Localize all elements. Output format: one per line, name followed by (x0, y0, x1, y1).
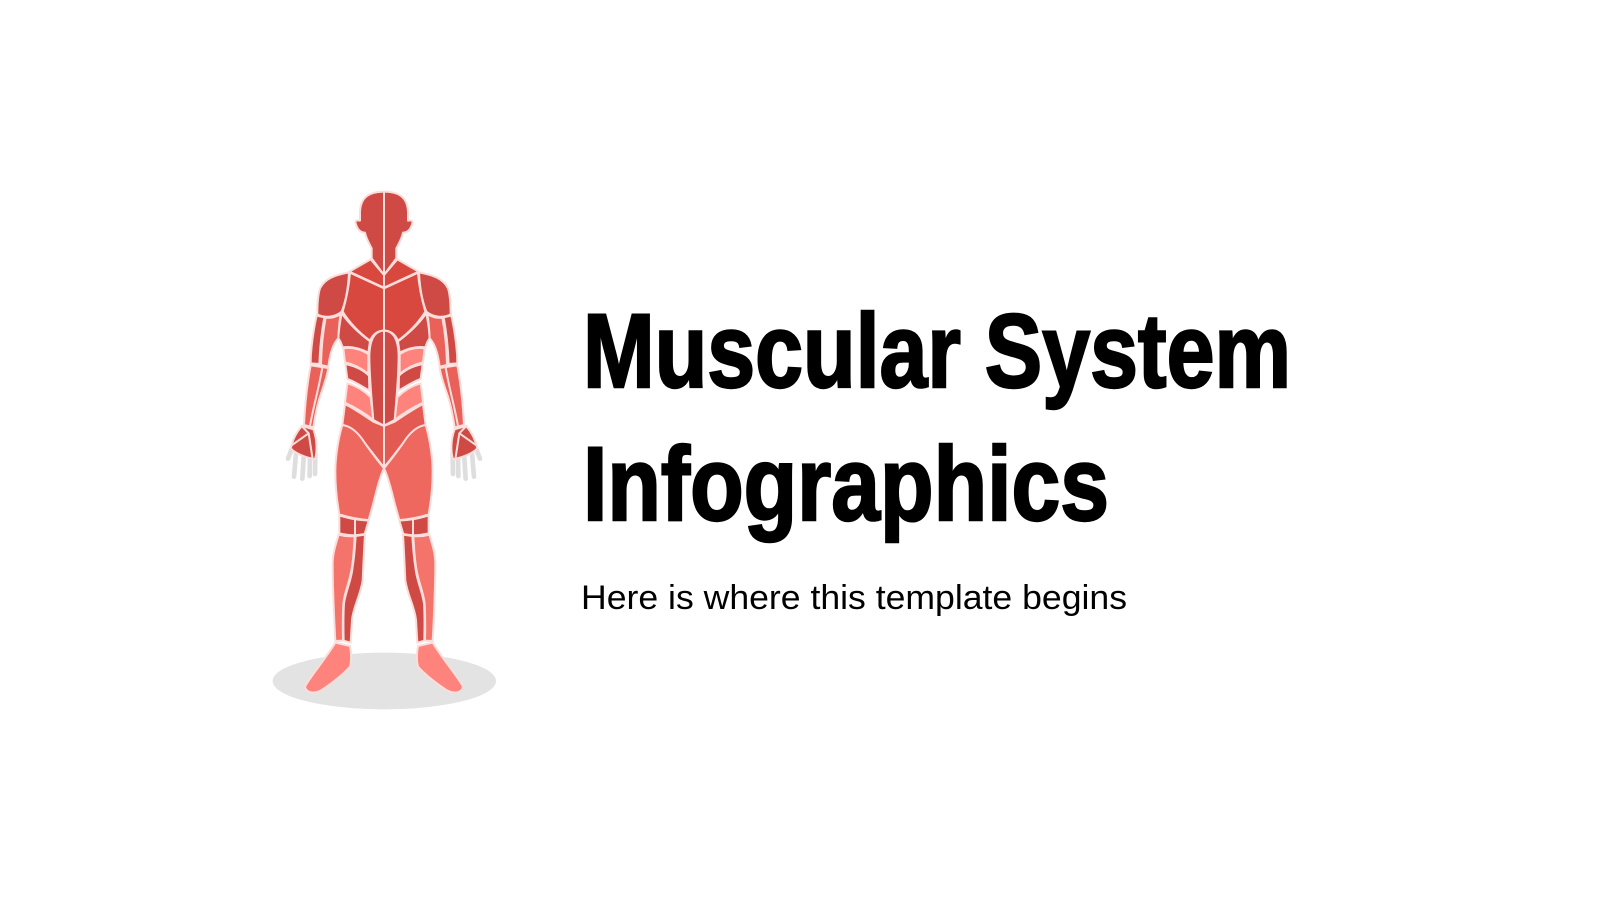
knee divider (352, 520, 358, 535)
upper arm outer (311, 316, 324, 364)
wrist and hand (291, 426, 317, 459)
hand dividers (292, 426, 313, 459)
illustration: human muscular figure (273, 192, 496, 709)
center line of the body (381, 192, 387, 467)
floor shadow (273, 653, 496, 709)
right half of the body (384, 192, 480, 692)
trapezius (349, 259, 384, 288)
title (583, 293, 1291, 543)
fingers (288, 445, 315, 479)
deltoid (317, 272, 349, 317)
forearm divider (310, 367, 322, 426)
upper abdominal stripe (343, 348, 368, 374)
forearm (304, 365, 328, 427)
head and neck (355, 192, 384, 275)
title line 1: Muscular System (583, 293, 1291, 410)
thigh (335, 425, 384, 520)
foot (305, 643, 351, 692)
left half of the body (288, 192, 384, 692)
calf inner (343, 535, 365, 643)
lower belly (342, 404, 384, 467)
middle abdominal stripe (345, 364, 369, 391)
lats (338, 313, 370, 353)
upper arm inner (321, 314, 341, 367)
calf outer (333, 535, 355, 641)
title line 2: Infographics (583, 426, 1109, 543)
lower abdominal stripe (345, 383, 373, 420)
subtitle: Here is where this template begins (581, 579, 1127, 617)
central abdominal muscle (369, 331, 384, 426)
knee (339, 515, 369, 535)
chest (343, 273, 384, 341)
